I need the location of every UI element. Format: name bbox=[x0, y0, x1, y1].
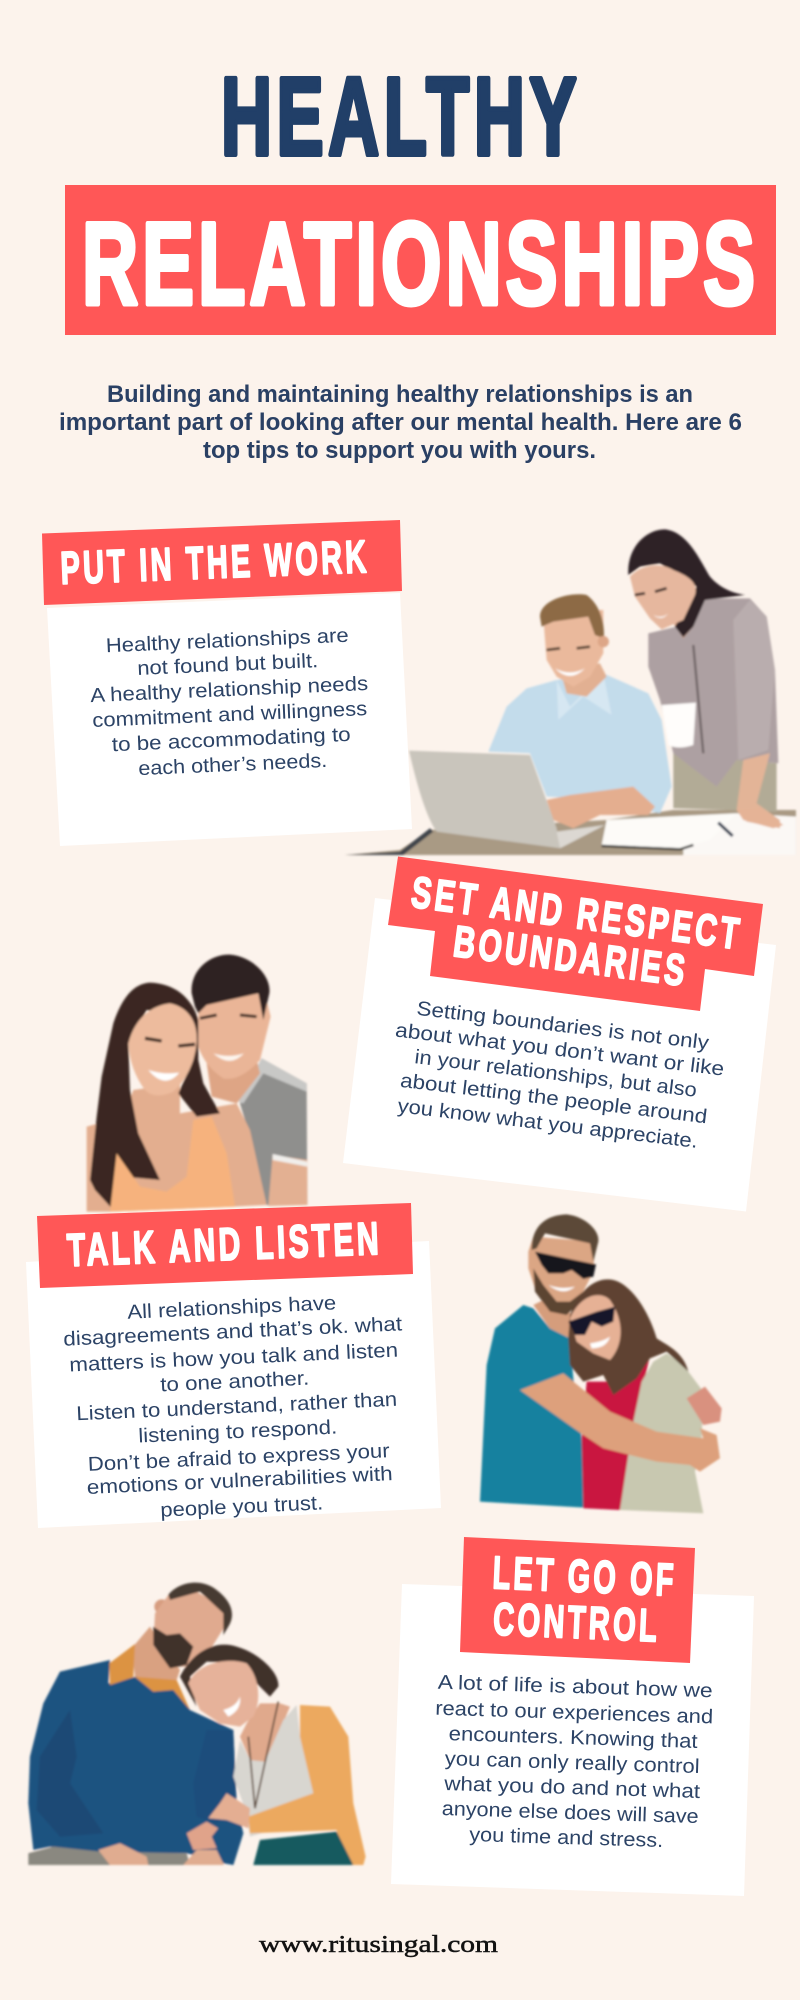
body text: listening to respond. bbox=[138, 1417, 338, 1448]
heading: LET GO OF bbox=[492, 1546, 678, 1606]
body text: people you trust. bbox=[160, 1492, 324, 1522]
body text: emotions or vulnerabilities with bbox=[86, 1463, 393, 1499]
body text: commitment and willingness bbox=[92, 698, 368, 732]
body text: anyone else does will save bbox=[441, 1798, 699, 1828]
heading bbox=[492, 1546, 678, 1651]
panel: let go of control bbox=[391, 1537, 754, 1896]
panel: set and respect boundaries bbox=[343, 856, 776, 1212]
body text: encounters. Knowing that bbox=[448, 1723, 698, 1753]
body text bbox=[394, 998, 725, 1153]
title: Healthy: HEALTHY bbox=[221, 56, 581, 178]
intro text: top tips to support you with yours. bbox=[203, 437, 596, 464]
body text: All relationships have bbox=[127, 1292, 337, 1324]
intro text bbox=[59, 381, 742, 464]
panel: put in the work bbox=[42, 520, 412, 846]
photo: smiling couple bbox=[87, 955, 307, 1212]
panel: talk and listen bbox=[26, 1203, 441, 1528]
body text: react to our experiences and bbox=[435, 1698, 713, 1728]
body text: A lot of life is about how we bbox=[437, 1672, 713, 1702]
body text: A healthy relationship needs bbox=[90, 673, 369, 707]
heading: PUT IN THE WORK bbox=[60, 530, 370, 594]
body text: to be accommodating to bbox=[111, 724, 351, 756]
website footer: www.ritusingal.com bbox=[259, 1932, 498, 1958]
body text: Don’t be afraid to express your bbox=[87, 1440, 390, 1476]
body text: not found but built. bbox=[137, 650, 319, 680]
photo: colleagues at laptop bbox=[345, 529, 796, 855]
body text: Listen to understand, rather than bbox=[76, 1389, 398, 1425]
body text: you time and stress. bbox=[469, 1824, 663, 1852]
body text: Healthy relationships are bbox=[105, 625, 349, 657]
body text: in your relationships, but also bbox=[413, 1046, 698, 1102]
body text: each other’s needs. bbox=[138, 750, 328, 780]
intro text: important part of looking after our mental health. Here are 6 bbox=[59, 409, 742, 436]
photo: couple hugging in sunglasses bbox=[480, 1214, 722, 1513]
photo: older couple leaning together bbox=[28, 1583, 366, 1865]
intro text: Building and maintaining healthy relationships is an bbox=[107, 381, 693, 408]
body text bbox=[435, 1672, 713, 1852]
body text: you know what you appreciate. bbox=[396, 1095, 699, 1153]
heading: TALK AND LISTEN bbox=[66, 1212, 383, 1276]
body text bbox=[90, 625, 369, 780]
body text: matters is how you talk and listen bbox=[69, 1340, 399, 1376]
body text: disagreements and that’s ok. what bbox=[63, 1313, 403, 1351]
heading: BOUNDARIES bbox=[451, 917, 691, 996]
body text bbox=[63, 1292, 403, 1522]
body text: you can only really control bbox=[444, 1748, 700, 1778]
body text: Setting boundaries is not only bbox=[415, 998, 710, 1054]
body text: about what you don’t want or like bbox=[394, 1020, 725, 1081]
body text: to one another. bbox=[160, 1368, 310, 1396]
body text: about letting the people around bbox=[399, 1070, 708, 1128]
heading: CONTROL bbox=[492, 1593, 661, 1651]
body text: what you do and not what bbox=[443, 1773, 701, 1803]
